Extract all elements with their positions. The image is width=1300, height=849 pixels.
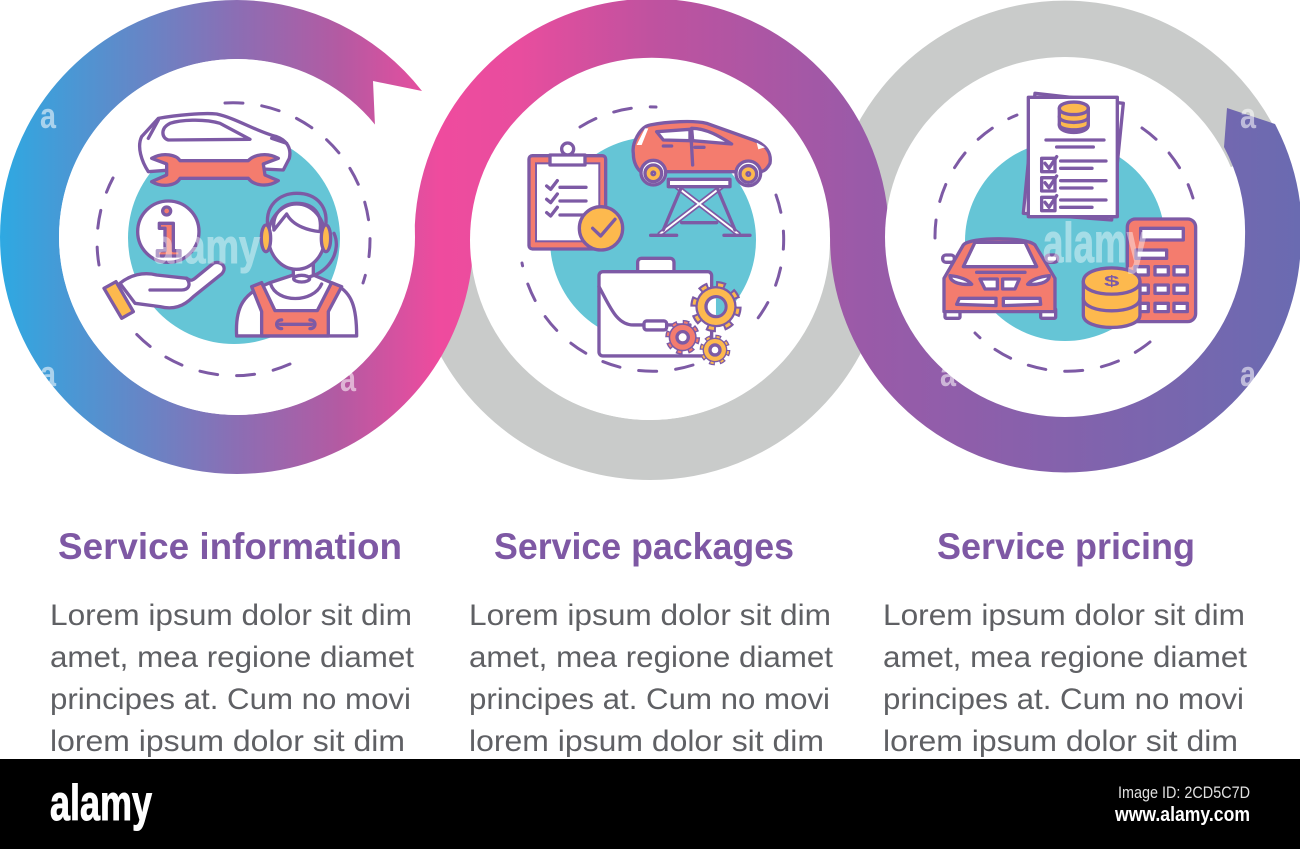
watermark letters on ring: a — [940, 353, 957, 394]
text block: column 1: lorem ipsum dolor sit dim — [50, 725, 405, 758]
icon: hand — [104, 262, 224, 318]
watermark letters on ring: a — [1240, 95, 1257, 136]
text block: column 1: principes at. Cum no movi — [50, 683, 411, 716]
panel: service pricing icon — [935, 93, 1196, 371]
text block: column 2 — [469, 599, 834, 758]
icon: info — [138, 201, 199, 262]
watermark: alamy — [1043, 211, 1147, 274]
text block: column 3: lorem ipsum dolor sit dim — [883, 725, 1238, 758]
icon group — [529, 122, 770, 363]
dashed ring — [935, 115, 1193, 371]
text block: column 3 — [883, 599, 1248, 758]
white circles — [59, 57, 1245, 420]
teal circle — [550, 137, 756, 343]
text block: column 1: Lorem ipsum dolor sit dim — [50, 599, 412, 632]
teal circle — [128, 132, 340, 344]
car window — [148, 120, 287, 143]
teal circle — [965, 141, 1165, 341]
text block: column 2: lorem ipsum dolor sit dim — [469, 725, 824, 758]
panel: service information icon — [97, 103, 370, 376]
text block: column 2: Lorem ipsum dolor sit dim — [469, 599, 831, 632]
watermark letters on ring: a — [1240, 353, 1257, 394]
heading: service pricing: Service pricing — [937, 526, 1195, 567]
icon: briefcase — [599, 258, 712, 356]
icon: car — [140, 114, 290, 172]
text block: column 2: amet, mea regione diamet — [469, 641, 834, 674]
text block: column 3: Lorem ipsum dolor sit dim — [883, 599, 1245, 632]
icon: calculator — [1127, 219, 1196, 322]
dashed ring — [97, 103, 370, 376]
icon: coin stack — [1083, 268, 1140, 327]
icon: document — [1023, 93, 1123, 220]
image id: Image ID: 2CD5C7D — [1118, 783, 1250, 802]
text block: column 3: amet, mea regione diamet — [883, 641, 1248, 674]
dashed ring — [522, 107, 784, 371]
icon: gears — [668, 285, 738, 363]
watermark: alamy — [153, 221, 260, 274]
icon: mechanic — [236, 193, 357, 336]
watermark letters on ring: a — [40, 353, 57, 394]
footer bar — [0, 759, 1300, 849]
text block: column 1 — [50, 599, 415, 758]
ribbon: grey background rings — [441, 31, 1255, 450]
panel: service packages icon — [522, 107, 784, 371]
icon group — [943, 93, 1196, 327]
icon: coin stack: $ — [1104, 273, 1120, 289]
icon: front car — [943, 239, 1058, 318]
heading: service information: Service information — [58, 526, 402, 567]
icon: clipboard — [529, 143, 623, 250]
text block: column 1: amet, mea regione diamet — [50, 641, 415, 674]
text block: column 2: principes at. Cum no movi — [469, 683, 830, 716]
icon: wrench — [152, 155, 278, 185]
watermark letters on ring — [40, 95, 1257, 399]
watermark letters on ring: a — [340, 358, 357, 399]
icon: car on lift — [633, 122, 770, 235]
website: www.alamy.com — [1114, 804, 1250, 826]
icon group — [104, 114, 357, 336]
text block: column 3: principes at. Cum no movi — [883, 683, 1244, 716]
heading: service packages: Service packages — [494, 526, 794, 567]
footer logo: alamy — [50, 775, 152, 831]
ribbon: gradient wave — [29, 0, 1300, 444]
watermark letters on ring: a — [40, 95, 57, 136]
